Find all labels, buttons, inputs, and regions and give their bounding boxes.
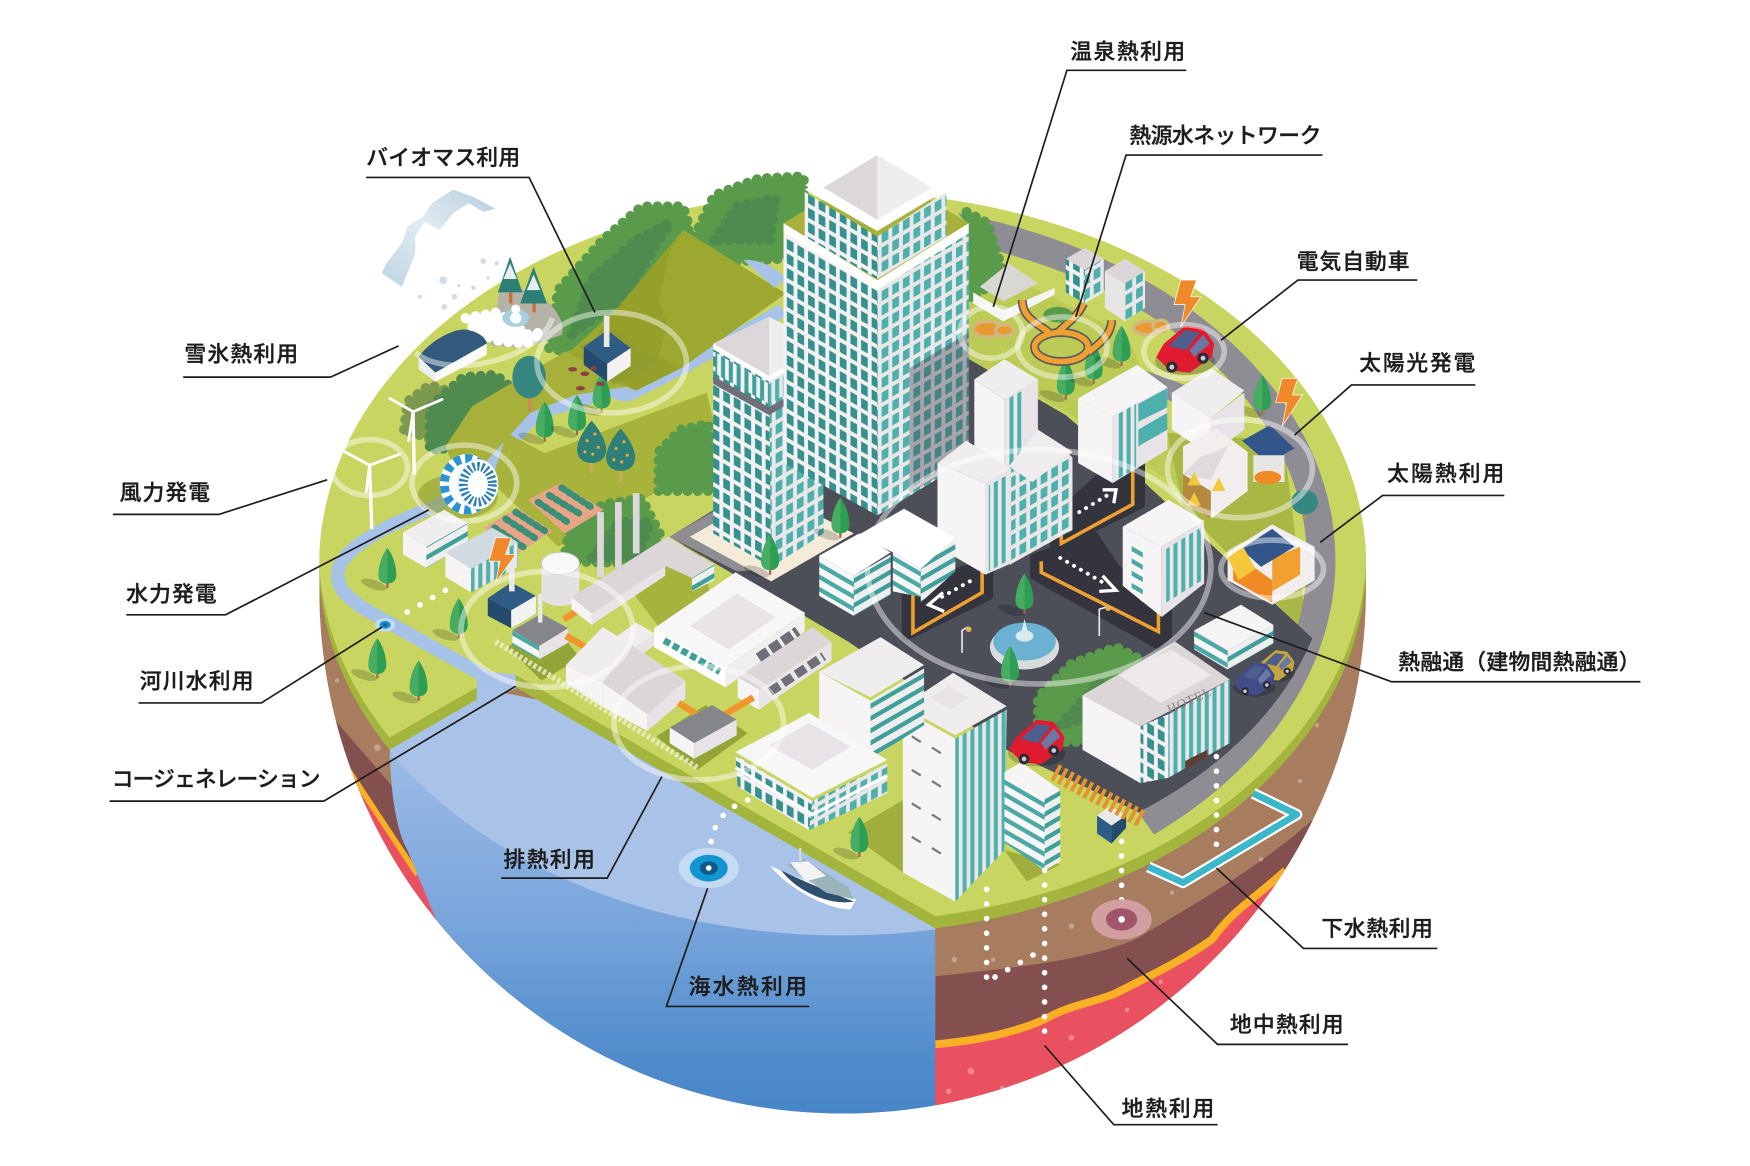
label: 熱源水ネットワーク: 熱源水ネットワーク: [1129, 123, 1321, 148]
snow storage shed: [419, 329, 487, 382]
label: 太陽熱利用: [1320, 461, 1504, 542]
tower: white top-right: [1078, 365, 1167, 483]
label: 水力発電: 水力発電: [126, 581, 217, 606]
teal tree right: [1291, 490, 1318, 519]
tank: [541, 552, 579, 606]
tower: main: [784, 148, 969, 515]
outer road: [958, 213, 1335, 835]
label: 太陽光発電: [1295, 350, 1476, 435]
layer: magma right: [935, 872, 1284, 1106]
plaza dashed arrows: [929, 490, 1116, 611]
label: 雪氷熱利用: 雪氷熱利用: [184, 342, 298, 367]
slim tower: [974, 379, 1004, 491]
river mouth: [477, 669, 516, 705]
exhaust factory yard: [656, 705, 748, 770]
road stub at ev car: [1133, 368, 1185, 402]
cars: [1008, 326, 1295, 766]
factory yard olive: [625, 536, 714, 642]
blue car: [1233, 662, 1275, 697]
ring: waste heat: [614, 666, 784, 780]
snow area: [382, 190, 563, 382]
water wheel: [418, 454, 498, 519]
grey box: [512, 614, 568, 646]
pipes: [679, 697, 753, 719]
big factory: [654, 572, 805, 687]
cogeneration plant: [488, 493, 640, 659]
label: 下水熱利用: 下水熱利用: [1321, 916, 1433, 941]
field rows: [483, 483, 604, 552]
olive slope: [491, 393, 725, 547]
icon: snow cloud: [382, 190, 496, 287]
label: コージェネレーション: コージェネレーション: [112, 767, 320, 792]
hill shadow: [580, 230, 683, 391]
east field olive: [960, 251, 1312, 638]
icon: river intake: [375, 618, 395, 632]
arrow heads: [929, 490, 1116, 611]
cogen yard: [508, 616, 580, 681]
soil specks: [335, 678, 1319, 1094]
ring: network: [1018, 317, 1107, 377]
heat pipes: [913, 469, 1158, 633]
forest: behind main tower: [966, 212, 1003, 300]
red car: [1008, 720, 1065, 766]
heat exchange pads: [906, 457, 1167, 645]
heat drops: [1187, 472, 1225, 505]
land surface: [319, 192, 1366, 916]
white striped building: [819, 637, 924, 759]
street lamps: [962, 605, 1111, 653]
label: バイオマス利用: [366, 145, 595, 312]
label: 太陽熱利用: 太陽熱利用: [1387, 461, 1504, 486]
tower: distant pair: [1066, 248, 1145, 321]
label: 河川水利用: [139, 627, 382, 703]
snow patch: [466, 312, 541, 344]
biomass plant: [568, 316, 659, 391]
heat source network pipes: [1022, 300, 1112, 362]
solar PV house: [1183, 425, 1295, 519]
label: 風力発電: [113, 480, 327, 514]
label: 地熱利用: [1045, 1045, 1218, 1125]
plaza west apron: [670, 504, 781, 571]
label: 水力発電: [126, 510, 429, 615]
wide teal building: [736, 713, 887, 830]
onsen lodge: [973, 263, 1055, 321]
fountain: [990, 619, 1059, 669]
layer: magma crust left: [348, 770, 418, 875]
label: 温泉熱利用: [993, 39, 1186, 307]
snowman: [502, 305, 529, 327]
label: 地中熱利用: [1127, 958, 1348, 1044]
ship: [770, 848, 856, 909]
white house: [1172, 368, 1244, 455]
forests behind the hills: [404, 176, 806, 452]
ring: onsen: [960, 307, 1022, 358]
ring: hydro: [412, 445, 517, 521]
chimneys: [597, 493, 640, 577]
label: バイオマス利用: バイオマス利用: [366, 145, 520, 170]
ring: ev: [1144, 325, 1224, 378]
label: 地中熱利用: 地中熱利用: [1230, 1012, 1344, 1037]
ponds behind hill: [743, 260, 786, 288]
label: 海水熱利用: [666, 888, 809, 1006]
left block: [937, 463, 985, 575]
label: 雪氷熱利用: [183, 342, 399, 377]
icon: pine trees: [498, 257, 547, 312]
tower: front white: [903, 673, 1007, 902]
hotel: [1083, 642, 1230, 783]
ring: snow: [415, 318, 553, 365]
long factory: [572, 537, 714, 658]
biomass chips: [568, 366, 605, 391]
hot spring pools: [973, 320, 1168, 337]
ring: biomass: [537, 312, 686, 413]
heat source rings: [332, 307, 1324, 780]
label: 河川水利用: 河川水利用: [140, 668, 254, 693]
olive under front towers: [848, 800, 903, 873]
ring: plaza: [867, 450, 1211, 684]
tower: center cluster: [937, 359, 1072, 575]
tower: round white: [1123, 500, 1204, 617]
teal tree: [512, 356, 546, 412]
solar thermal house: [1228, 524, 1315, 605]
hill: [569, 230, 786, 391]
label: 太陽光発電: 太陽光発電: [1359, 350, 1476, 375]
security fence: [496, 642, 698, 768]
mid office: [819, 509, 955, 616]
snow flakes: [418, 258, 499, 310]
terrain patches: [445, 230, 1312, 881]
label: 電気自動車: [1221, 249, 1417, 340]
label: 排熱利用: [501, 777, 662, 878]
river: [338, 310, 782, 683]
blue block: [488, 582, 536, 610]
sea surface: [390, 669, 935, 935]
land lip: [319, 204, 1366, 928]
label: 熱融通（建物間熱融通）: [1204, 613, 1640, 682]
forests: [564, 212, 1138, 742]
icon: lightning bolts: [489, 280, 1302, 582]
ring: solar thermal: [1221, 540, 1324, 598]
forest: top back: [549, 176, 806, 353]
grey rock: [491, 289, 563, 348]
layer: deep earth right: [935, 819, 1314, 1106]
dotted connections: [399, 590, 1216, 1043]
green shrub: [1043, 307, 1072, 322]
heat mat: [1055, 772, 1144, 820]
wind turbines: [345, 398, 442, 528]
label: 下水熱利用: [1216, 868, 1437, 948]
yellow car: [1256, 650, 1295, 682]
label: 熱源水ネットワーク: [1076, 123, 1322, 317]
label: コージェネレーション: [110, 686, 516, 801]
small building near hotel: [1194, 605, 1273, 669]
orange pipes: [564, 609, 594, 652]
hotel sign: HOTEL: [1165, 684, 1214, 717]
grey exhaust factory: [670, 705, 737, 759]
layer: magma left: [354, 780, 469, 956]
ring: solar PV: [1167, 420, 1312, 518]
label: 電気自動車: 電気自動車: [1297, 249, 1409, 274]
solar panel: [1242, 425, 1295, 463]
tower: small striped: [1004, 762, 1060, 870]
forest: left: [404, 375, 508, 452]
forest: hotel side: [1038, 647, 1138, 742]
plant box ground heat: [1097, 806, 1126, 844]
trees: [350, 326, 1318, 862]
icon: sea intake: [679, 848, 739, 888]
label: 熱融通（建物間熱融通）: 熱融通（建物間熱融通）: [1398, 649, 1640, 674]
central plaza road: [670, 357, 1312, 812]
icon: ground heat well: [1091, 899, 1152, 939]
tower: second: [690, 317, 854, 581]
ring: cogen: [461, 571, 633, 687]
small factory buildings west: [403, 510, 518, 592]
sewer pipe: [1148, 793, 1297, 883]
label: 海水熱利用: 海水熱利用: [689, 974, 807, 999]
olive terrace: [445, 335, 683, 482]
label: 排熱利用: 排熱利用: [503, 847, 595, 872]
label: 風力発電: 風力発電: [120, 480, 210, 505]
layer: deep earth left: [336, 720, 446, 932]
ring: wind: [332, 440, 407, 495]
long building: [679, 627, 831, 719]
forest: mid: [564, 424, 714, 563]
layer: magma crust right: [935, 870, 1286, 1044]
sea cross-section: [390, 752, 935, 1116]
bowl: ground cross-section layers: [301, 524, 1384, 1116]
right block: [1009, 446, 1072, 565]
label: 温泉熱利用: 温泉熱利用: [1070, 39, 1185, 64]
label: 地熱利用: 地熱利用: [1122, 1096, 1214, 1121]
orange core: [1022, 300, 1112, 362]
saw-tooth factories: [566, 627, 685, 731]
